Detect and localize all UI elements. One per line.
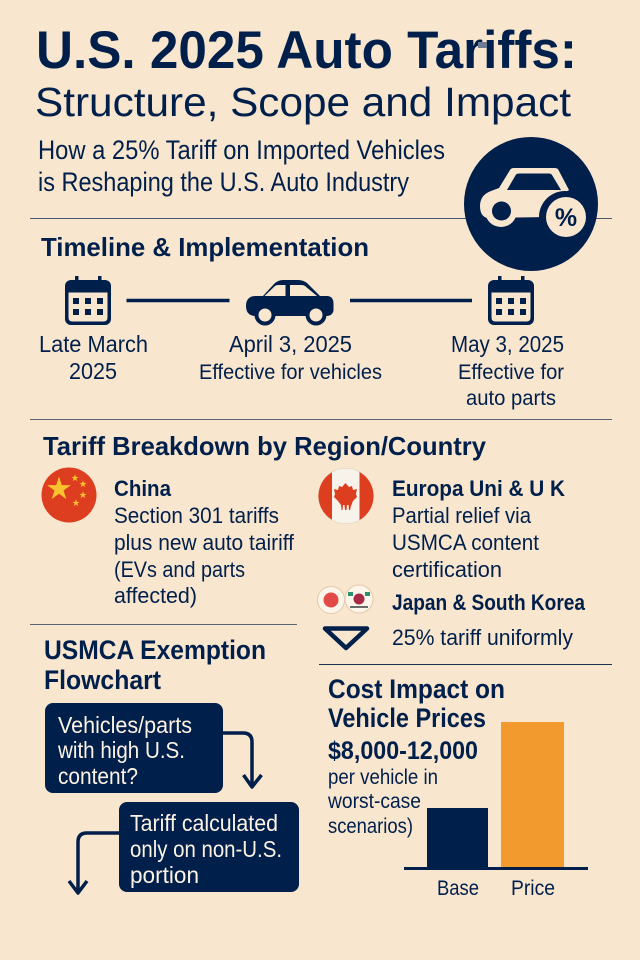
bar chart: Base	[437, 877, 479, 900]
intro text: is Reshaping the U.S. Auto Industry	[38, 167, 410, 197]
icon: calendar start	[65, 276, 111, 325]
text: cost figure: worst-case	[327, 790, 421, 813]
text: china	[114, 476, 295, 608]
text: europe and uk	[392, 476, 565, 582]
arrow: question to result	[223, 733, 262, 787]
icon: japan flag	[318, 586, 344, 614]
text: uniform tariff: 25% tariff uniformly	[392, 625, 573, 650]
text: europe and uk: certification	[392, 557, 502, 582]
flowchart box: result	[119, 802, 299, 892]
timeline label: late march: Late March	[39, 331, 148, 357]
flowchart box: result: only on non-U.S.	[130, 836, 282, 862]
heading: cost impact: Vehicle Prices	[328, 703, 486, 733]
timeline label: april 3: Effective for vehicles	[199, 360, 382, 384]
flowchart box: question: with high U.S.	[57, 737, 185, 763]
text: japan and south korea: Japan & South Korea	[392, 590, 586, 615]
text: cost figure: per vehicle in	[328, 766, 438, 789]
heading: cost impact	[328, 674, 505, 733]
icon: canada flag	[318, 468, 374, 524]
timeline label: may 3	[451, 331, 564, 410]
heading: cost impact: Cost Impact on	[328, 674, 505, 704]
text: cost figure: scenarios)	[328, 815, 413, 838]
timeline label: late march	[39, 331, 148, 384]
icon: car with percent badge	[464, 137, 598, 271]
text: cost figure: $8,000-12,000	[328, 737, 478, 765]
icon: calendar end	[488, 276, 534, 325]
timeline label: may 3: May 3, 2025	[451, 331, 564, 357]
subtitle heading: Structure, Scope and Impact	[35, 79, 572, 125]
intro text: How a 25% Tariff on Imported Vehicles	[38, 135, 445, 165]
icon: china flag	[42, 468, 96, 522]
flowchart box: question: Vehicles/parts	[58, 712, 192, 738]
bar chart	[404, 722, 588, 900]
timeline label: late march: 2025	[69, 358, 117, 384]
timeline label: april 3	[199, 331, 382, 384]
flowchart box: result: Tariff calculated	[130, 810, 278, 836]
arrow: result downward	[69, 833, 119, 893]
icon: triangle	[325, 628, 367, 648]
flowchart box: result: portion	[130, 862, 199, 888]
icon: car with percent badge: %	[555, 204, 577, 232]
text: china: affected)	[114, 583, 197, 608]
flowchart box: question: content?	[58, 763, 138, 789]
bar chart: Price	[511, 877, 555, 900]
heading: usmca flowchart	[44, 635, 266, 695]
timeline label: may 3: Effective for	[458, 360, 564, 384]
text: cost figure	[327, 737, 478, 838]
flowchart box: question	[45, 703, 223, 793]
heading: usmca flowchart: Flowchart	[44, 665, 161, 695]
icon: south korea flag	[345, 585, 373, 613]
intro text	[38, 135, 445, 197]
text: europe and uk: Europa Uni & U K	[392, 476, 565, 501]
timeline label: april 3: April 3, 2025	[229, 331, 352, 357]
timeline label: may 3: auto parts	[466, 386, 556, 410]
title: U.S. 2025 Auto Tariffs:	[36, 21, 577, 80]
heading: tariff breakdown: Tariff Breakdown by Region/Country	[43, 431, 487, 461]
heading: usmca flowchart: USMCA Exemption	[44, 635, 266, 665]
text: europe and uk: USMCA content	[392, 530, 539, 555]
heading: timeline: Timeline & Implementation	[41, 232, 369, 262]
text: china: Section 301 tariffs	[114, 503, 279, 528]
text: china: China	[114, 476, 172, 501]
text: china: plus new auto tairiff	[114, 530, 295, 555]
text: china: (EVs and parts	[114, 557, 245, 582]
icon: car	[246, 280, 334, 326]
text: europe and uk: Partial relief via	[392, 503, 532, 528]
